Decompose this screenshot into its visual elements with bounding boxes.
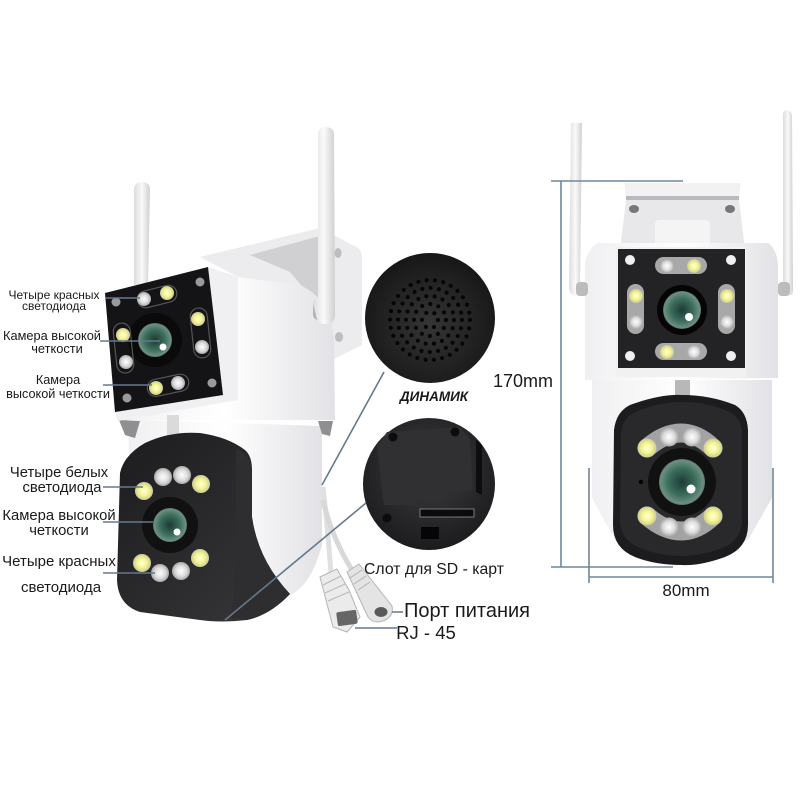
label: top camera: четкости bbox=[31, 341, 83, 356]
screws bbox=[112, 278, 216, 402]
dimension lines bbox=[551, 181, 773, 583]
neck post bbox=[167, 415, 179, 437]
label: RJ-45: RJ - 45 bbox=[396, 622, 456, 643]
LEDs upper bbox=[116, 286, 209, 395]
label: second camera: Камера bbox=[36, 373, 80, 387]
lens lower bbox=[153, 508, 187, 542]
SD slot bbox=[420, 509, 474, 517]
label: lower camera: четкости bbox=[29, 523, 89, 539]
label: top camera: Камера высокой bbox=[3, 328, 101, 343]
antenna joint bbox=[313, 300, 325, 320]
black upper panel bbox=[105, 267, 223, 412]
right camera black head bbox=[613, 395, 748, 565]
antenna joints bbox=[576, 282, 790, 296]
head lens ring bbox=[648, 448, 716, 516]
front antenna bbox=[313, 127, 335, 324]
right camera upper body bbox=[585, 243, 778, 380]
white panel lip bbox=[105, 267, 238, 421]
labels bbox=[2, 288, 710, 643]
power connector bbox=[347, 564, 392, 622]
label: white LEDs: Четыре белых bbox=[10, 465, 108, 481]
ring ends bbox=[119, 420, 333, 438]
panel screws bbox=[625, 255, 736, 361]
head inner panel bbox=[620, 402, 742, 556]
cables and connectors bbox=[320, 487, 392, 632]
SD cover bbox=[377, 427, 473, 505]
label: speaker: ДИНАМИК bbox=[399, 389, 470, 404]
right camera right antenna bbox=[783, 110, 793, 296]
RJ-45 connector bbox=[320, 569, 360, 632]
LED housings upper bbox=[112, 283, 212, 398]
lower body bbox=[128, 420, 322, 597]
right camera lower body bbox=[592, 380, 772, 540]
speaker detail bbox=[365, 253, 495, 383]
label: second camera: высокой четкости bbox=[6, 387, 110, 401]
label: lower camera: Камера высокой bbox=[2, 508, 116, 524]
panel pills bbox=[627, 257, 735, 360]
SD circle bbox=[363, 418, 495, 550]
right camera bbox=[569, 110, 793, 565]
mount holes bbox=[334, 248, 343, 342]
SD notch bbox=[421, 527, 439, 539]
cable to power port bbox=[323, 500, 352, 570]
right camera left antenna bbox=[569, 123, 582, 296]
speaker circle bbox=[365, 253, 495, 383]
black lower head bbox=[117, 433, 290, 622]
right camera upper panel bbox=[616, 247, 746, 377]
label: power port: Порт питания bbox=[404, 600, 530, 622]
LEDs lower bbox=[133, 466, 210, 582]
wall mount bbox=[200, 228, 362, 361]
label: top red LEDs: Четыре красных bbox=[9, 288, 99, 302]
cable to RJ-45 bbox=[323, 487, 331, 574]
right camera mount bbox=[620, 183, 745, 250]
antenna: back left bbox=[134, 182, 150, 285]
SD slot detail bbox=[363, 418, 495, 550]
callout lines bbox=[100, 298, 403, 628]
LED arcs bbox=[647, 433, 713, 531]
speaker holes bbox=[390, 280, 470, 360]
panel lens bbox=[663, 291, 701, 329]
label: top red LEDs: светодиода bbox=[22, 299, 86, 313]
panel lens ring bbox=[657, 285, 707, 335]
lens upper bbox=[138, 323, 172, 357]
panel LEDs bbox=[629, 259, 734, 359]
label: white LEDs: светодиода bbox=[22, 480, 102, 496]
microphone hole bbox=[639, 480, 643, 484]
left camera bbox=[105, 127, 362, 622]
label: lower red LEDs: Четыре красных bbox=[2, 553, 116, 570]
head lens bbox=[659, 459, 705, 505]
lens ring lower bbox=[142, 497, 198, 553]
label: lower red LEDs: светодиода bbox=[21, 579, 102, 596]
SD screws bbox=[382, 428, 460, 522]
label: SD slot: Слот для SD - карт bbox=[364, 561, 504, 578]
mount inner shade bbox=[250, 236, 322, 310]
upper body bbox=[115, 267, 335, 420]
lens ring upper bbox=[128, 313, 182, 367]
label: width: 80mm bbox=[662, 581, 710, 600]
head LEDs bbox=[638, 428, 722, 536]
label: height: 170mm bbox=[493, 371, 553, 391]
